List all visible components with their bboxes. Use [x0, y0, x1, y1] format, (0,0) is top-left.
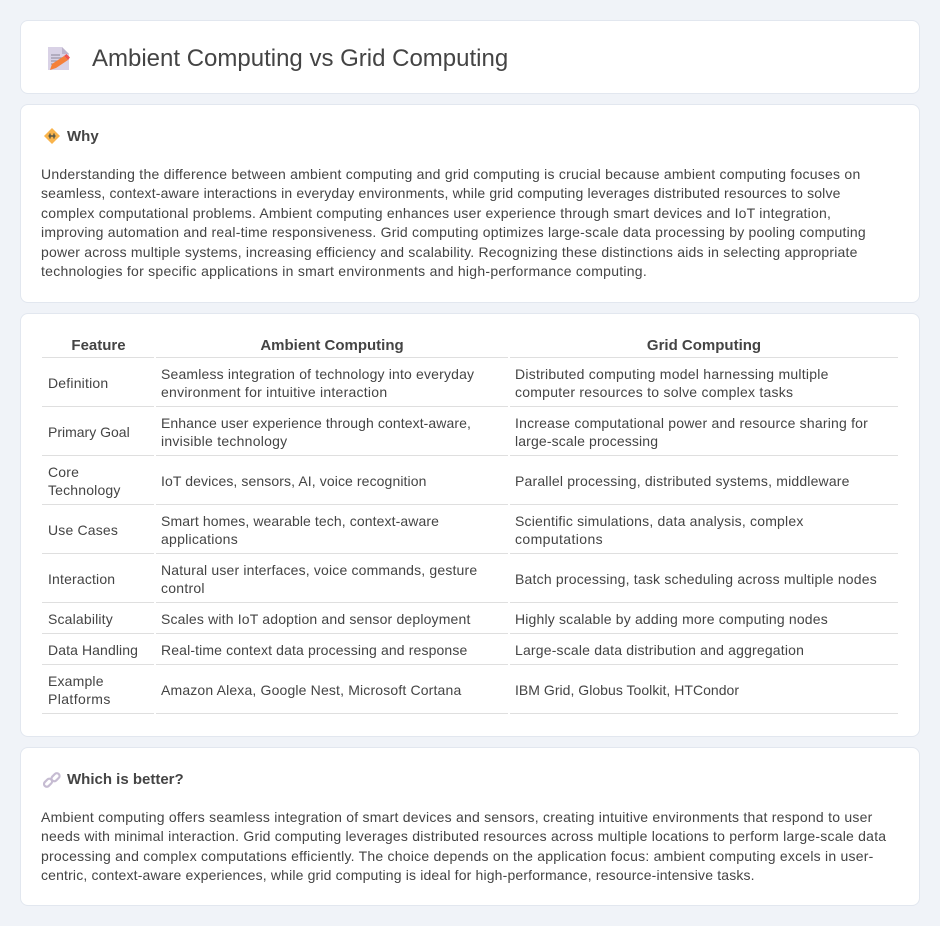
row: data handling: Data Handling — [48, 642, 138, 658]
row: example platforms: Platforms — [48, 691, 111, 707]
row: use cases: computations — [515, 531, 603, 547]
text block: which is better paragraph — [41, 809, 886, 883]
row: interaction: Interaction — [48, 571, 115, 587]
panel: why — [20, 104, 920, 303]
row: interaction: Batch processing, task scheduling across multiple nodes — [515, 571, 877, 587]
table header — [71, 337, 761, 354]
row: definition: Definition — [48, 375, 108, 391]
row: scalability: Scalability — [48, 611, 113, 627]
row: use cases: Scientific simulations, data analysis, complex — [515, 513, 804, 529]
text block: why paragraph: complex computational problems. Ambient computing enhances user experience through smart devices and IoT integration, — [41, 205, 831, 221]
table header: Ambient Computing — [260, 337, 404, 354]
row: definition: Seamless integration of technology into everyday — [161, 366, 474, 382]
panel: which is better — [20, 747, 920, 906]
row: definition: environment for intuitive interaction — [161, 384, 387, 400]
row: core technology: Core — [48, 464, 79, 480]
icon: warning diamond — [44, 128, 60, 144]
text block: which is better paragraph: processing and complex computations efficiently. The choice depends on the application focus: ambient computing excels in user- — [41, 848, 873, 864]
row: interaction — [48, 562, 877, 596]
row: scalability — [48, 611, 828, 627]
text block: which is better paragraph: needs with minimal interaction. Grid computing leverages distributed resources across multiple locations to perform large-scale data — [41, 828, 886, 844]
icon: document with pencil — [48, 47, 70, 70]
row: example platforms: Amazon Alexa, Google Nest, Microsoft Cortana — [161, 682, 461, 698]
text block: why paragraph: technologies for specific applications in smart environments and high-performance computing. — [41, 263, 647, 279]
row: core technology — [48, 464, 850, 498]
table header: Feature — [71, 337, 126, 354]
row: primary goal: Increase computational power and resource sharing for — [515, 415, 868, 431]
row: data handling: Real-time context data processing and response — [161, 642, 467, 658]
row: interaction: control — [161, 580, 205, 596]
table header: Grid Computing — [647, 337, 761, 354]
text block: why paragraph: power across multiple systems, increasing efficiency and scalability. Recognizing these distinctions aids in selecting appropriate — [41, 244, 858, 260]
panel: comparison table — [20, 313, 920, 737]
icon: link — [43, 772, 61, 788]
row: use cases — [48, 513, 804, 547]
row: primary goal: Primary Goal — [48, 424, 130, 440]
row: example platforms — [48, 673, 739, 707]
row: primary goal — [48, 415, 868, 449]
row: definition: computer resources to solve complex tasks — [515, 384, 793, 400]
row: core technology: Parallel processing, distributed systems, middleware — [515, 473, 850, 489]
text block: which is better paragraph: centric, context-aware experiences, while grid computing is ideal for high-performance, resource-intensive tasks. — [41, 867, 755, 883]
row: core technology: Technology — [48, 482, 121, 498]
title: Ambient Computing vs Grid Computing — [92, 45, 508, 72]
row: primary goal: Enhance user experience through context-aware, — [161, 415, 471, 431]
row: definition — [48, 366, 829, 400]
row: use cases: Use Cases — [48, 522, 118, 538]
row: interaction: Natural user interfaces, voice commands, gesture — [161, 562, 477, 578]
row: definition: Distributed computing model harnessing multiple — [515, 366, 829, 382]
row: example platforms: Example — [48, 673, 104, 689]
row: scalability: Scales with IoT adoption and sensor deployment — [161, 611, 471, 627]
text block: why paragraph: Understanding the difference between ambient computing and grid computing is crucial because ambient computing focuses on — [41, 166, 860, 182]
row: use cases: Smart homes, wearable tech, context-aware — [161, 513, 439, 529]
panel: title header — [20, 20, 920, 94]
row: primary goal: invisible technology — [161, 433, 287, 449]
row: primary goal: large-scale processing — [515, 433, 658, 449]
table: comparison — [42, 337, 898, 714]
row: data handling — [48, 642, 804, 658]
row: scalability: Highly scalable by adding more computing nodes — [515, 611, 828, 627]
row: use cases: applications — [161, 531, 238, 547]
row: example platforms: IBM Grid, Globus Toolkit, HTCondor — [515, 682, 739, 698]
row: data handling: Large-scale data distribution and aggregation — [515, 642, 804, 658]
text block: why paragraph — [41, 166, 866, 279]
heading: why: Why — [67, 128, 99, 145]
text block: which is better paragraph: Ambient computing offers seamless integration of smart devices and sensors, creating intuitive environments that respond to user — [41, 809, 872, 825]
heading: which is better: Which is better? — [67, 771, 184, 788]
text block: why paragraph: seamless, context-aware interactions in everyday environments, while grid computing leverages distributed resources to solve — [41, 185, 841, 201]
text block: why paragraph: improving automation and real-time responsiveness. Grid computing optimizes large-scale data processing by pooling computing — [41, 224, 866, 240]
row: core technology: IoT devices, sensors, AI, voice recognition — [161, 473, 427, 489]
